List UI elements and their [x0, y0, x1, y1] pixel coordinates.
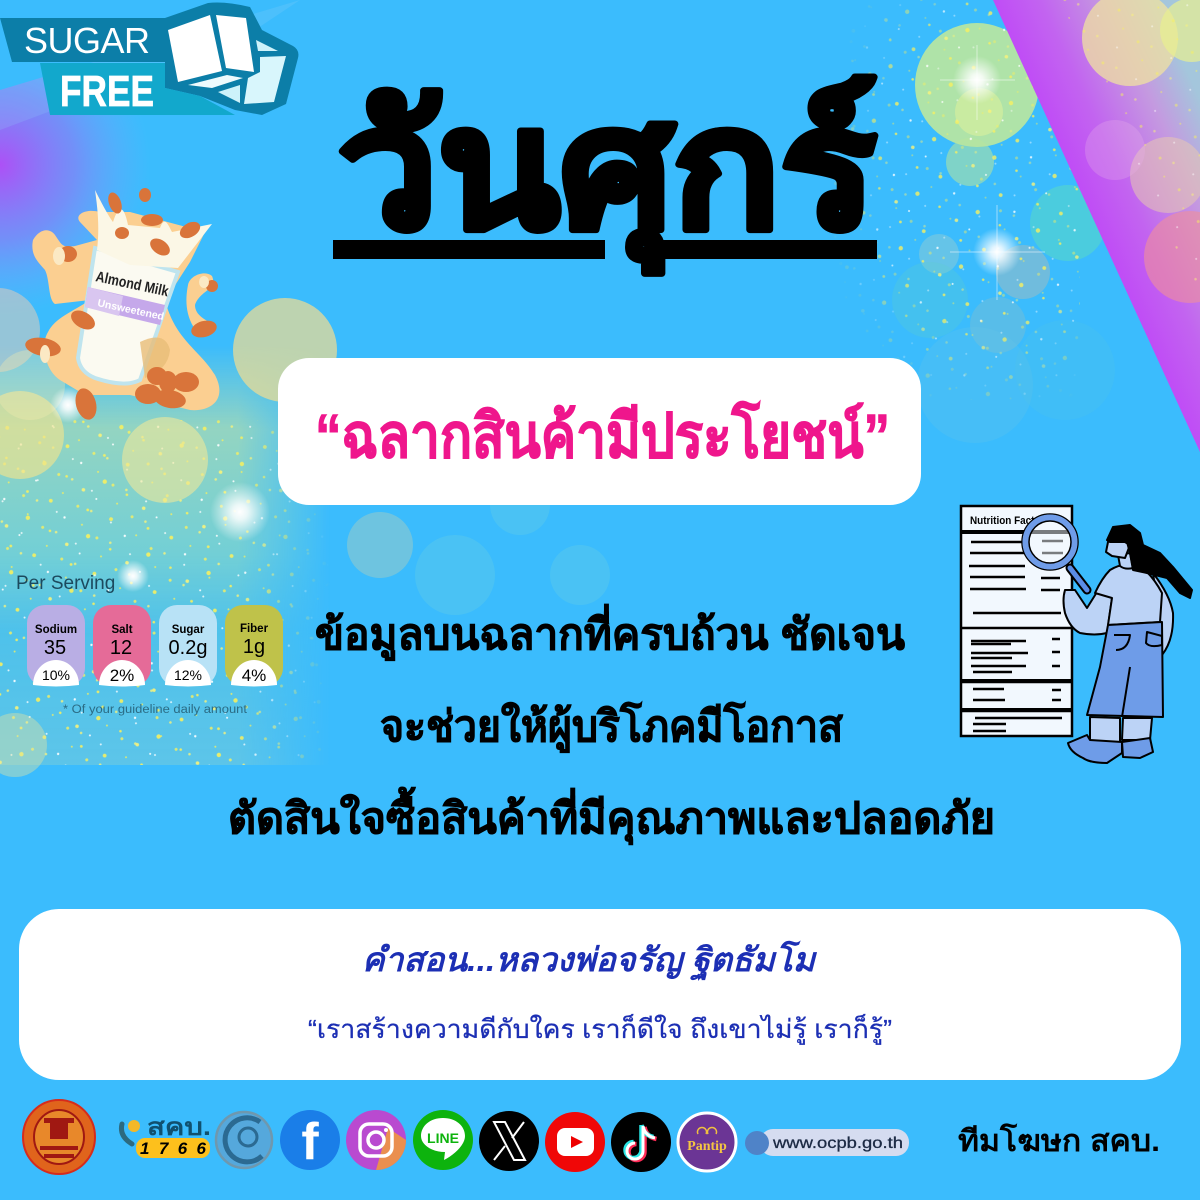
nutrient: fiber: [225, 605, 283, 686]
nutrition per serving: * Of your guideline daily amount: [63, 704, 248, 716]
body text: ตัดสินใจซื้อสินค้าที่มีคุณภาพและปลอดภัย: [228, 786, 995, 846]
illustration: almond milk: Unsweetened: [96, 297, 165, 323]
body text: จะช่วยให้ผู้บริโภคมีโอกาส: [380, 700, 844, 753]
nutrient: sodium: 35: [44, 637, 66, 659]
icon: line: [413, 1110, 473, 1170]
quote text: “เราสร้างความดีกับใคร เราก็ดีใจ ถึงเขาไม่รู้ เราก็รู้”: [308, 1013, 892, 1045]
body text: ข้อมูลบนฉลากที่ครบถ้วน ชัดเจน: [315, 604, 906, 661]
title underline: [333, 240, 877, 259]
nutrient: salt: [93, 605, 151, 686]
nutrient: fiber: 4%: [242, 666, 266, 685]
nutrient: salt: 2%: [110, 666, 134, 685]
icon: pantip: [678, 1113, 736, 1171]
team credit: ทีมโฆษก สคบ.: [958, 1122, 1160, 1158]
nutrient: fiber: Fiber: [240, 623, 269, 635]
nutrient: sugar: 0.2g: [169, 637, 207, 659]
milk cup: [78, 248, 178, 384]
illustration: person reading nutrition facts: [961, 506, 1192, 763]
panel: label heading: [278, 358, 921, 505]
nutrition per serving: [16, 573, 283, 716]
title: วันศุกร์: [338, 75, 876, 274]
body text: [228, 604, 995, 846]
icon: hotline 1766: [121, 1114, 211, 1158]
cream splash: [32, 211, 219, 410]
nutrient: sugar: Sugar: [172, 624, 205, 636]
background: [0, 0, 1200, 777]
icon: facebook: f: [301, 1113, 319, 1171]
nutrition facts sheet: [961, 506, 1072, 736]
nutrition per serving: Per Serving: [16, 573, 115, 594]
icon: pantip: Pantip: [687, 1139, 727, 1154]
nutrient: salt: Salt: [111, 624, 133, 636]
icon: instagram: [346, 1110, 406, 1170]
icon: tiktok: [611, 1112, 671, 1172]
magnifying glass: [1022, 514, 1087, 590]
nutrient: sodium: [27, 605, 85, 686]
nutrient: sugar: [159, 605, 217, 686]
illustration: almond milk: [24, 188, 219, 422]
illustration: almond milk: Almond Milk: [94, 268, 171, 300]
icon: line: LINE: [427, 1130, 459, 1146]
icon: hotline 1766: สคบ.: [147, 1114, 211, 1141]
heading: useful labels: “ฉลากสินค้ามีประโยชน์”: [315, 400, 890, 470]
purple triangle top right: [993, 0, 1200, 452]
icon: x: [479, 1111, 539, 1171]
top right bokeh: [820, 0, 1115, 443]
nutrient: fiber: 1g: [243, 636, 265, 658]
icon: youtube: [545, 1112, 605, 1172]
icon: hotline 1766: 1766: [140, 1139, 207, 1158]
logo: sugar free: SUGAR: [24, 20, 150, 61]
icon: agency seal: [23, 1100, 95, 1174]
person: [1064, 525, 1192, 763]
nutrient: sodium: 10%: [42, 667, 70, 683]
nutrition facts sheet: Nutrition Facts: [970, 515, 1040, 527]
website badge: www.ocpb.go.th: [772, 1135, 903, 1152]
logo: sugar free: [0, 2, 298, 116]
quote heading: คำสอน...หลวงพ่อจรัญ ฐิตธัมโม: [362, 940, 817, 982]
panel: teaching quote: [19, 909, 1181, 1080]
icon: cpc logo: [216, 1112, 272, 1168]
logo: sugar free: FREE: [60, 67, 154, 116]
website badge: [745, 1129, 909, 1156]
nutrient: sodium: Sodium: [35, 624, 77, 636]
nutrient: salt: 12: [110, 637, 132, 659]
nutrient: sugar: 12%: [174, 667, 202, 683]
icon: facebook: [280, 1110, 340, 1171]
footer icons: [23, 1100, 909, 1174]
